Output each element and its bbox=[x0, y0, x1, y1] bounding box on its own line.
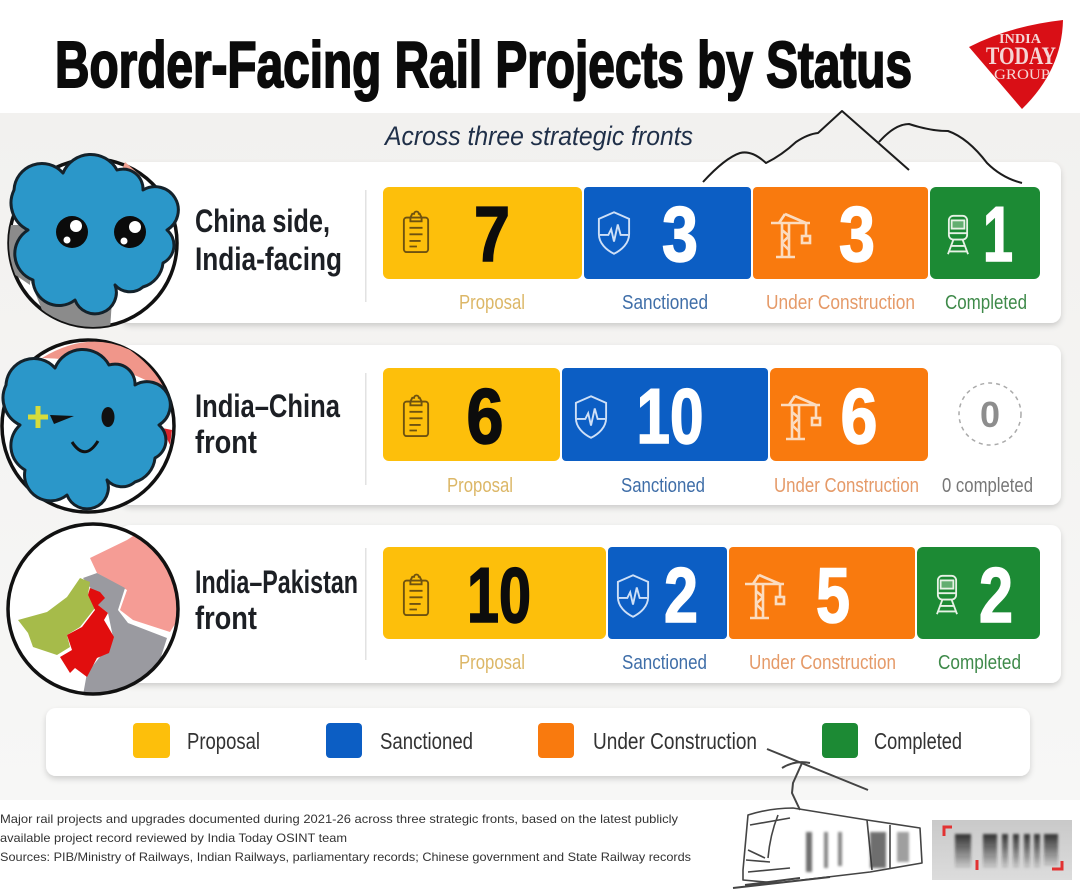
divider bbox=[365, 548, 366, 660]
map badge: India-China with mascot cover bbox=[2, 340, 174, 512]
row heading: front bbox=[195, 600, 257, 636]
divider bbox=[365, 373, 366, 485]
stacked bar: 2 bbox=[979, 551, 1013, 639]
mountain line art bbox=[703, 111, 1022, 183]
row heading: India-facing bbox=[195, 241, 342, 277]
row heading: India–China bbox=[195, 388, 340, 424]
legend: completed bbox=[822, 723, 962, 758]
row heading bbox=[195, 203, 342, 277]
legend: proposal: Proposal bbox=[187, 728, 260, 754]
mascot wink face bbox=[28, 406, 114, 452]
logo: India Today Group: TODAY bbox=[986, 43, 1056, 70]
stacked bar: 6 bbox=[466, 372, 504, 460]
source notes: Major rail projects and upgrades documented during 2021-26 across three strategic fronts, based on the latest publicly bbox=[0, 812, 678, 826]
bar labels: 0 completed bbox=[942, 475, 1033, 497]
stacked bar: 10 bbox=[467, 551, 531, 639]
stacked bar: 6 bbox=[840, 372, 878, 460]
map: China region bbox=[90, 536, 176, 632]
row heading: front bbox=[195, 424, 257, 460]
map badge: India-Pakistan bbox=[8, 524, 190, 700]
zero completed marker bbox=[959, 383, 1021, 445]
bar labels: Proposal bbox=[459, 652, 525, 674]
bar labels: Sanctioned bbox=[621, 475, 705, 497]
stacked bar bbox=[383, 547, 1040, 639]
divider bbox=[365, 190, 366, 302]
panel: India-Pakistan front bbox=[120, 525, 1061, 683]
bar labels: Sanctioned bbox=[622, 652, 707, 674]
legend: sanctioned: Sanctioned bbox=[380, 728, 473, 754]
stacked bar: 3 bbox=[839, 190, 875, 278]
logo: India Today Group: GROUP bbox=[994, 67, 1050, 83]
footer band bbox=[0, 800, 1080, 895]
bar labels: Proposal bbox=[459, 292, 525, 314]
panel: China side, India-facing bbox=[120, 162, 1061, 323]
stacked bar: 1 bbox=[983, 190, 1013, 278]
row heading bbox=[195, 388, 340, 460]
logo: India Today Group: INDIA bbox=[999, 32, 1042, 47]
legend: sanctioned bbox=[326, 723, 473, 758]
panel: legend bbox=[46, 708, 1030, 776]
bar labels: Completed bbox=[945, 292, 1027, 314]
subtitle: Across three strategic fronts bbox=[383, 121, 693, 151]
panel: India-China front bbox=[120, 345, 1061, 505]
stacked bar: 2 bbox=[664, 551, 698, 639]
logo: India Today Group bbox=[969, 20, 1063, 109]
stacked bar: 5 bbox=[816, 551, 850, 639]
stacked bar bbox=[383, 368, 928, 461]
legend: under construction: Under Construction bbox=[593, 728, 757, 754]
row heading: India–Pakistan bbox=[195, 564, 358, 600]
stacked bar: 7 bbox=[474, 190, 510, 278]
bar labels: Completed bbox=[938, 652, 1021, 674]
stacked bar: 10 bbox=[636, 372, 704, 460]
bar labels: Under Construction bbox=[774, 475, 919, 497]
row heading: China side, bbox=[195, 203, 330, 239]
bar labels bbox=[459, 652, 1021, 674]
bar labels: Proposal bbox=[447, 475, 513, 497]
map badge: China side with mascot cover bbox=[8, 154, 178, 330]
bar labels: Under Construction bbox=[749, 652, 896, 674]
logo: blurred broadcaster mark bbox=[932, 820, 1072, 880]
icon: tram sketch bbox=[733, 749, 922, 888]
stacked bar: 3 bbox=[662, 190, 698, 278]
mascot eyes bbox=[56, 216, 146, 248]
source notes bbox=[0, 812, 691, 864]
zero completed marker: 0 bbox=[980, 394, 1000, 435]
legend: proposal bbox=[133, 723, 260, 758]
page background band bbox=[0, 113, 1080, 800]
map: Pakistan region bbox=[18, 578, 95, 655]
map: India region bbox=[83, 573, 167, 700]
source notes: available project record reviewed by India Today OSINT team bbox=[0, 831, 347, 845]
stacked bar bbox=[383, 187, 1040, 279]
legend: completed: Completed bbox=[874, 728, 962, 754]
bar labels bbox=[459, 292, 1027, 314]
map: highlighted border states bbox=[60, 588, 114, 677]
bar labels bbox=[447, 475, 1033, 497]
source notes: Sources: PIB/Ministry of Railways, Indian Railways, parliamentary records; Chinese government and State Railway records bbox=[0, 850, 691, 864]
legend: under construction bbox=[538, 723, 757, 758]
bar labels: Under Construction bbox=[766, 292, 915, 314]
row heading bbox=[195, 564, 358, 636]
bar labels: Sanctioned bbox=[622, 292, 708, 314]
